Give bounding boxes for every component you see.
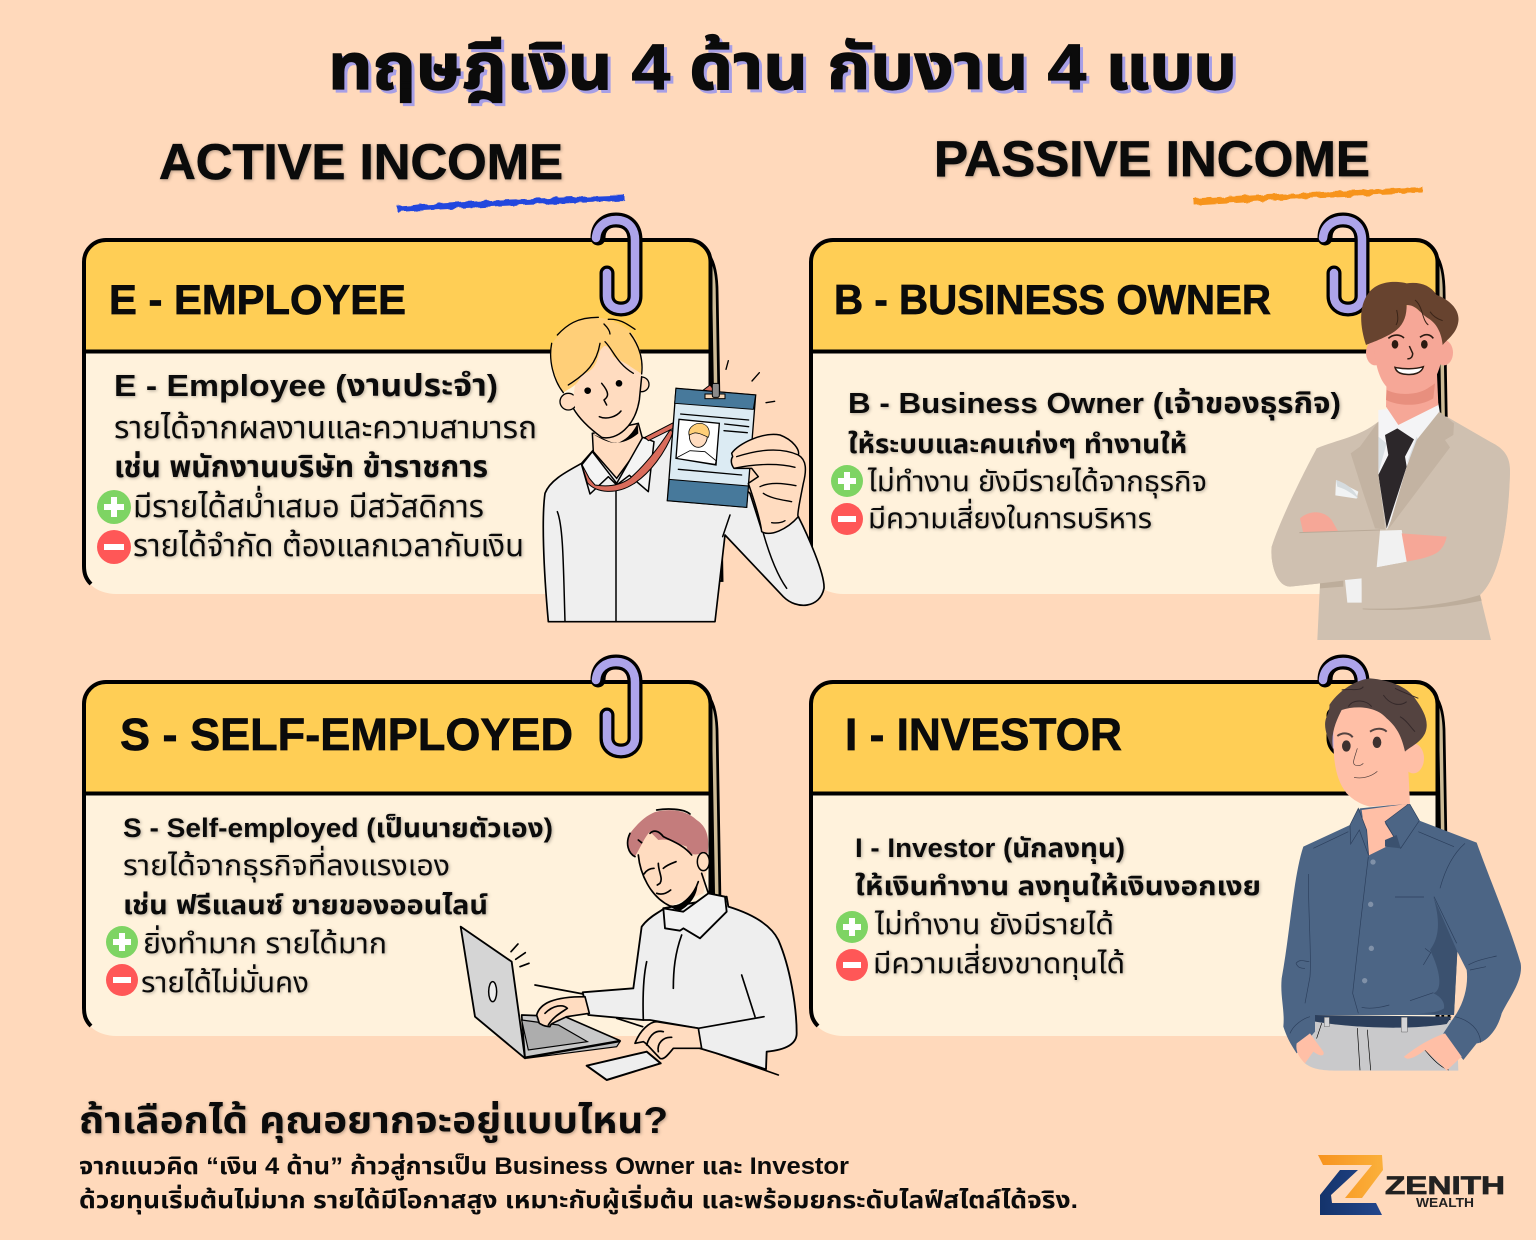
panel: E employee xyxy=(84,220,719,594)
text block: S self-employed: S - Self-employed (เป็นนายตัวเอง) xyxy=(123,813,553,843)
icon: paper clip I xyxy=(1323,662,1362,751)
text block: E employee: มีรายได้สม่ำเสมอ มีสวัสดิการ xyxy=(133,485,484,524)
logo: Zenith Wealth xyxy=(1318,1155,1505,1215)
heading: B business owner: B - BUSINESS OWNER xyxy=(834,276,1271,323)
logo: Zenith Wealth: WEALTH xyxy=(1416,1195,1474,1210)
heading: E employee: E - EMPLOYEE xyxy=(109,276,406,323)
panel: I investor xyxy=(811,662,1446,1036)
heading: active income: ACTIVE INCOME xyxy=(159,134,563,190)
text block: S self-employed xyxy=(123,813,553,999)
text block: E employee: รายได้จำกัด ต้องแลกเวลากับเงิน xyxy=(133,528,524,563)
text block: S self-employed: รายได้จากธุรกิจที่ลงแรงเอง xyxy=(123,845,450,882)
text block: I investor: มีความเสี่ยงขาดทุนได้ xyxy=(873,943,1125,980)
icon: paper clip S xyxy=(596,662,635,751)
illustration: self-employed working on laptop xyxy=(461,809,797,1080)
text block: S self-employed: ยิ่งทำมาก รายได้มาก xyxy=(143,925,387,960)
text block: S self-employed: เช่น ฟรีแลนซ์ ขายของออนไลน์ xyxy=(123,890,488,920)
icon: minus xyxy=(97,530,131,564)
closing text: จากแนวคิด “เงิน 4 ด้าน” ก้าวสู่การเป็น Business Owner และ Investor xyxy=(79,1152,849,1181)
logo: Zenith Wealth: ZENITH xyxy=(1385,1172,1505,1200)
illustration: investor in blue shirt xyxy=(1281,678,1521,1071)
icon: paper clip B xyxy=(1323,220,1362,309)
icon: plus xyxy=(97,490,131,524)
icon: plus xyxy=(831,465,863,497)
icon: minus xyxy=(106,964,138,996)
icon: minus xyxy=(836,949,868,981)
title: ทฤษฎีเงิน 4 ด้าน กับงาน 4 แบบ xyxy=(328,31,1237,103)
text block: B business owner xyxy=(848,388,1341,535)
closing text xyxy=(79,1152,1078,1215)
panel: B business owner xyxy=(811,220,1446,594)
panel: S self-employed xyxy=(84,662,719,1036)
icon: paper clip E xyxy=(596,220,635,309)
text block: B business owner: ไม่ทำงาน ยังมีรายได้จากธุรกิจ xyxy=(867,466,1207,498)
underline: passive income xyxy=(1194,190,1423,202)
text block: I investor: ให้เงินทำงาน ลงทุนให้เงินงอกเงย xyxy=(855,871,1261,902)
text block: I investor xyxy=(855,833,1261,980)
text block: E employee: เช่น พนักงานบริษัท ข้าราชการ xyxy=(114,451,488,484)
text block: I investor: I - Investor (นักลงทุน) xyxy=(855,833,1125,864)
heading: I investor: I - INVESTOR xyxy=(845,709,1122,760)
text block: B business owner: ให้ระบบและคนเก่งๆ ทำงานให้ xyxy=(848,429,1187,459)
illustration: business owner in suit xyxy=(1271,282,1510,640)
text block: I investor: ไม่ทำงาน ยังมีรายได้ xyxy=(874,909,1114,941)
underline: active income xyxy=(397,198,625,209)
text block: B business owner: มีความเสี่ยงในการบริหาร xyxy=(868,498,1152,535)
closing text: ด้วยทุนเริ่มต้นไม่มาก รายได้มีโอกาสสูง เหมาะกับผู้เริ่มต้น และพร้อมยกระดับไลฟ์สไตล์ได้จริง. xyxy=(79,1184,1078,1215)
closing question: ถ้าเลือกได้ คุณอยากจะอยู่แบบไหน? xyxy=(79,1100,668,1143)
icon: plus xyxy=(836,911,868,943)
icon: minus xyxy=(831,503,863,535)
illustration: employee holding ID badge xyxy=(543,317,824,622)
text block: E employee: รายได้จากผลงานและความสามารถ xyxy=(114,410,537,445)
heading: S self-employed: S - SELF-EMPLOYED xyxy=(120,709,573,760)
text block: S self-employed: รายได้ไม่มั่นคง xyxy=(141,964,309,999)
heading: passive income: PASSIVE INCOME xyxy=(934,131,1370,187)
text block: E employee xyxy=(114,368,537,563)
icon: plus xyxy=(106,926,138,958)
text block: E employee: E - Employee (งานประจำ) xyxy=(114,368,498,403)
text block: B business owner: B - Business Owner (เจ้าของธุรกิจ) xyxy=(848,388,1341,420)
